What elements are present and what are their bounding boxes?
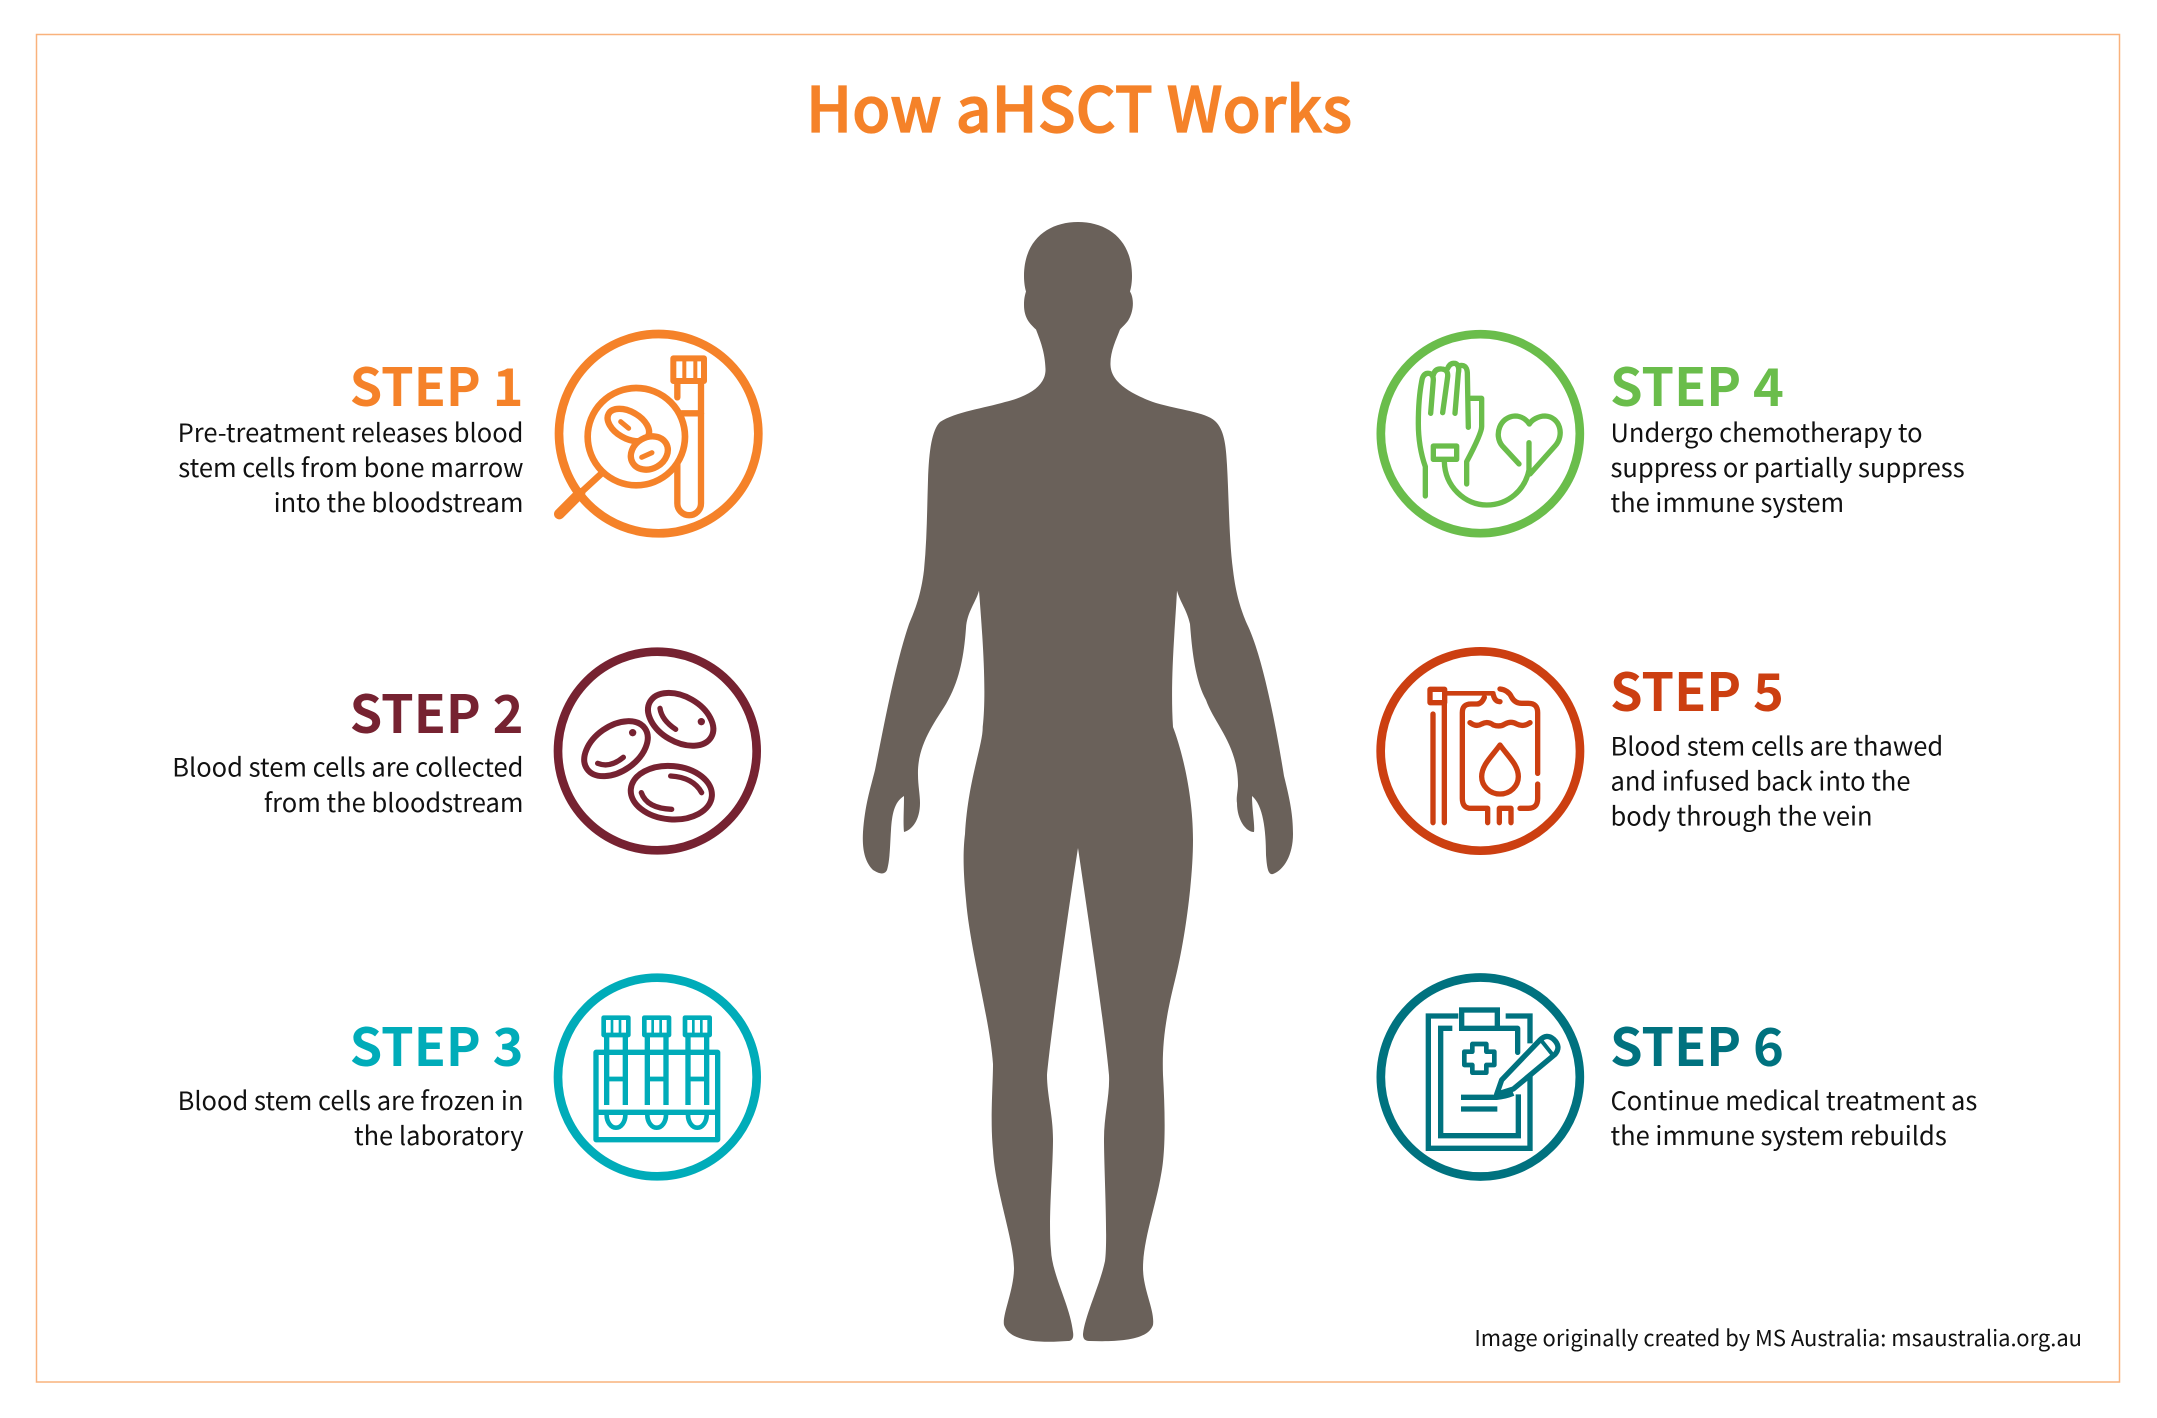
panel: step 6 [1381, 977, 1977, 1176]
title: How aHSCT Works [806, 60, 1352, 150]
step 3 description: the laboratory [354, 1116, 524, 1153]
step 6 description: Continue medical treatment as [1610, 1081, 1977, 1118]
step 2 heading: STEP 2 [350, 673, 524, 749]
step 5 description: and infused back into the [1610, 762, 1911, 798]
icon: magnifier and test tube [559, 334, 758, 533]
panel: step 3 [178, 978, 757, 1176]
step 3 description: Blood stem cells are frozen in [178, 1081, 524, 1118]
icon: hand with heart and tube [1381, 334, 1580, 533]
step 6 description: the immune system rebuilds [1610, 1116, 1947, 1153]
step 1 description: Pre-treatment releases blood [178, 413, 524, 450]
step 1 heading: STEP 1 [350, 346, 524, 422]
step 6 heading: STEP 6 [1610, 1006, 1784, 1082]
step 5 description: body through the vein [1610, 796, 1873, 834]
step 1 description: into the bloodstream [274, 483, 524, 520]
step 4 description: suppress or partially suppress [1610, 448, 1965, 485]
step 4 heading: STEP 4 [1610, 346, 1784, 422]
panel: step 1 [178, 334, 758, 533]
step 4 description: Undergo chemotherapy to [1610, 413, 1923, 450]
step 4 description: the immune system [1610, 483, 1844, 520]
step 5 heading: STEP 5 [1610, 651, 1784, 727]
step 2 description: from the bloodstream [264, 783, 524, 820]
step 3 heading: STEP 3 [350, 1006, 524, 1082]
human body silhouette [863, 222, 1293, 1342]
panel: step 4 [1381, 334, 1965, 533]
panel: step 5 [1381, 651, 1943, 851]
icon: IV blood bag [1381, 651, 1580, 851]
icon: blood cells [558, 652, 757, 850]
step 2 description: Blood stem cells are collected [172, 748, 524, 784]
icon: test tube rack [558, 978, 757, 1176]
step 5 description: Blood stem cells are thawed [1610, 726, 1943, 764]
icon: clipboard with medical cross and pencil [1381, 977, 1580, 1176]
panel: step 2 [172, 652, 757, 850]
step 1 description: stem cells from bone marrow [178, 448, 524, 485]
image credit: Image originally created by MS Australia: msaustralia.org.au [1474, 1322, 2082, 1353]
